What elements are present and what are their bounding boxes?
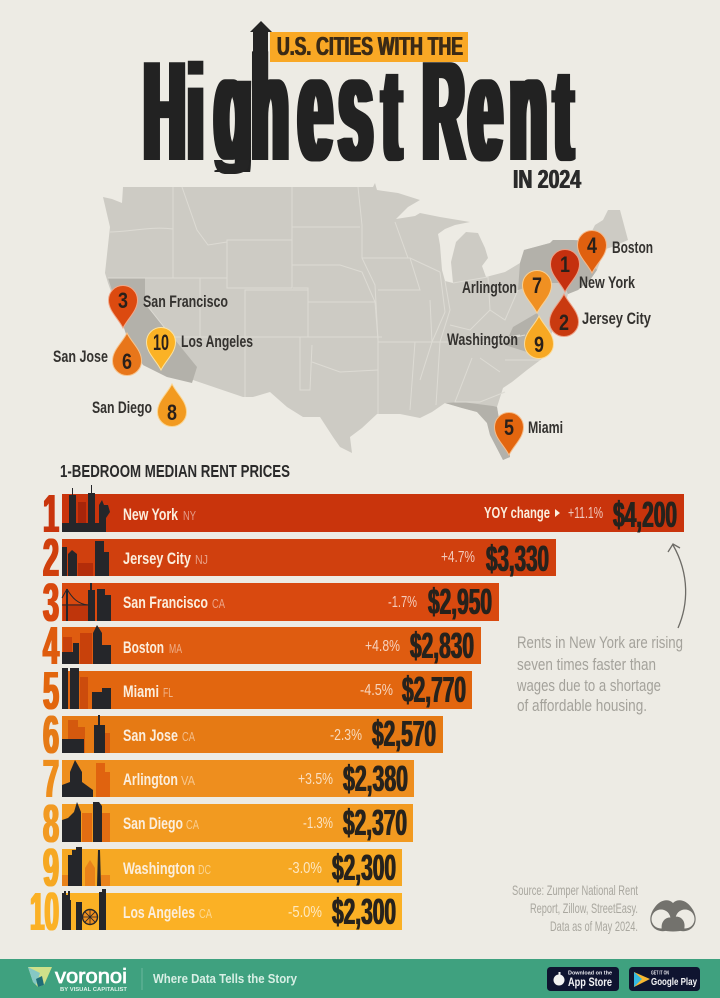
state border lines	[108, 187, 540, 414]
row 3: San Francisco: $2,950	[428, 581, 492, 622]
row 2: Jersey City: NJ	[195, 552, 208, 567]
row 9: Washington: 9	[43, 838, 59, 898]
map landmass	[103, 183, 628, 460]
map city labels: Washington	[447, 331, 518, 349]
pin: 10 Los Angeles	[146, 328, 176, 370]
badge: App Store: App Store	[568, 975, 612, 989]
row 2: Jersey City: +4.7%	[441, 549, 475, 566]
pin: 4 Boston: 4	[587, 233, 598, 258]
pin: 2 Jersey City	[550, 294, 578, 336]
title: Highest Rent: t	[383, 42, 401, 189]
pin: 7 Arlington: 7	[532, 273, 542, 298]
title: Highest Rent	[144, 51, 576, 172]
highlighted states: New York and New England	[518, 240, 597, 294]
pin: 3 San Francisco	[108, 286, 138, 328]
source note: Source: Zumper National Rent	[512, 882, 638, 898]
badge: App Store: Download on the	[568, 970, 612, 976]
bar chart: 1-bedroom median rent	[30, 484, 684, 942]
row 3: San Francisco: -1.7%	[388, 594, 417, 611]
map city labels: New York	[579, 274, 636, 292]
row 6: San Jose: -2.3%	[330, 727, 362, 744]
row 10: Los Angeles	[30, 882, 402, 942]
callout text	[516, 633, 683, 715]
map city labels: Jersey City	[582, 310, 652, 328]
title: Highest Rent: ghes	[215, 26, 372, 193]
row 9: Washington: Washington	[123, 860, 195, 878]
row 2: Jersey City	[43, 528, 556, 588]
chart heading: 1-BEDROOM MEDIAN RENT PRICES	[60, 461, 290, 481]
pin: 5 Miami	[494, 412, 524, 455]
row 1: New York: New York	[123, 506, 179, 524]
title: Highest Rent: R	[423, 31, 464, 190]
logo: Voronoi mark	[28, 967, 52, 987]
pin: 9 Washington	[524, 316, 554, 358]
pin: 6 San Jose: 6	[122, 349, 132, 374]
row 1: New York: 1	[43, 484, 59, 544]
map of the United States with pins	[53, 183, 653, 460]
letter g hook	[214, 160, 249, 174]
row 2: Jersey City: $3,330	[486, 538, 549, 579]
map city labels: Boston	[612, 239, 653, 257]
row 7: Arlington: +3.5%	[298, 771, 333, 788]
row 5: Miami: 5	[43, 661, 59, 721]
row 1: New York	[43, 484, 684, 544]
pin: 7 Arlington	[522, 270, 552, 313]
row 9: Washington: DC	[198, 862, 211, 877]
row 10: Los Angeles: 10	[30, 882, 59, 942]
footer bar	[0, 959, 720, 998]
icon: binoculars	[650, 900, 696, 932]
row 6: San Jose	[43, 705, 443, 765]
row 9: Washington: $2,300	[332, 847, 396, 888]
row 7: Arlington: VA	[181, 773, 195, 788]
badge: Google Play	[629, 967, 700, 991]
title: Highest Rent: i	[188, 38, 203, 190]
tagline: Where Data Tells the Story	[153, 972, 297, 986]
row 10: Los Angeles: Los Angeles	[123, 904, 195, 922]
map city labels: San Diego	[92, 399, 152, 417]
row 8: San Diego: -1.3%	[303, 815, 333, 832]
arrow: callout pointing to New York bar	[668, 544, 686, 628]
row 6: San Jose: San Jose	[123, 727, 178, 745]
pin: 1 New York	[550, 250, 580, 292]
row 6: San Jose: CA	[182, 729, 195, 744]
source note: Report, Zillow, StreetEasy.	[530, 900, 638, 916]
row 5: Miami: Miami	[123, 683, 159, 701]
callout text: seven times faster than	[517, 655, 656, 674]
row 3: San Francisco: San Francisco	[123, 594, 208, 612]
badge: Google Play: Google Play	[651, 976, 697, 988]
pin: 5 Miami: 5	[504, 415, 514, 440]
subtitle: in 2024: IN 2024	[513, 164, 581, 194]
row 6: San Jose: $2,570	[372, 713, 436, 754]
title: Highest Rent: t	[555, 42, 572, 189]
pin: 9 Washington: 9	[534, 332, 544, 357]
row 2: Jersey City: 2	[43, 528, 59, 588]
icon: up arrow rising from the h	[250, 21, 272, 80]
pin: 8 San Diego: 8	[167, 400, 177, 425]
map city labels: Arlington	[462, 279, 517, 297]
row 3: San Francisco	[43, 573, 499, 633]
row 10: Los Angeles: CA	[199, 906, 212, 921]
row 3: San Francisco: 3	[43, 573, 59, 633]
pin: 2 Jersey City: 2	[559, 310, 569, 335]
row 5: Miami: -4.5%	[360, 682, 393, 699]
row 6: San Jose: 6	[43, 705, 59, 765]
row 9: Washington	[43, 838, 402, 898]
row 2: Jersey City: Jersey City	[123, 550, 192, 568]
row 1: New York: +11.1%	[568, 505, 603, 522]
row 4: Boston: $2,830	[410, 625, 474, 666]
row 8: San Diego: San Diego	[123, 815, 183, 833]
row 9: Washington: -3.0%	[288, 860, 322, 877]
source note	[512, 882, 638, 934]
source note: Data as of May 2024.	[550, 918, 638, 934]
row 8: San Diego: $2,370	[343, 802, 407, 843]
row 8: San Diego: CA	[186, 817, 199, 832]
wordmark: voronoi: BY VISUAL CAPITALIST	[60, 987, 127, 993]
row 4: Boston: Boston	[123, 639, 164, 657]
title: Highest Rent: en	[469, 26, 547, 193]
row 5: Miami: FL	[163, 685, 173, 700]
badge: App Store	[547, 967, 619, 991]
subtitle highlight: U.S. cities with the: U.S. CITIES WITH THE	[277, 31, 463, 61]
pin: 4 Boston	[578, 230, 606, 273]
row 1: New York: NY	[183, 508, 196, 523]
pin: 8 San Diego	[158, 384, 186, 426]
callout text: of affordable housing.	[517, 696, 647, 715]
map city labels: Miami	[528, 419, 563, 437]
map city labels: San Francisco	[143, 293, 228, 311]
row 8: San Diego	[43, 794, 413, 854]
highlighted states: California	[108, 278, 197, 383]
title: Highest Rent: H	[144, 31, 185, 190]
badge: Google Play: GET IT ON	[651, 970, 669, 976]
row 5: Miami: $2,770	[402, 669, 466, 710]
row 4: Boston: +4.8%	[365, 638, 400, 655]
pin: 3 San Francisco: 3	[118, 288, 128, 313]
row 3: San Francisco: CA	[212, 596, 225, 611]
row 7: Arlington: 7	[43, 749, 59, 809]
pin: 10 Los Angeles: 10	[153, 330, 169, 355]
row 8: San Diego: 8	[43, 794, 59, 854]
row 7: Arlington: Arlington	[123, 771, 178, 789]
pin: 1 New York: 1	[560, 252, 570, 277]
row 4: Boston: 4	[43, 616, 59, 676]
row 7: Arlington	[43, 749, 414, 809]
map city labels: Los Angeles	[181, 333, 253, 351]
row 7: Arlington: $2,380	[343, 758, 408, 799]
row 1: New York: YOY change	[484, 505, 550, 522]
row 10: Los Angeles: $2,300	[332, 891, 396, 932]
row 5: Miami	[43, 661, 472, 721]
row 4: Boston	[43, 616, 481, 676]
title block	[144, 21, 581, 194]
pin: 6 San Jose	[112, 333, 142, 376]
map city labels: San Jose	[53, 348, 108, 366]
row 4: Boston: MA	[169, 641, 182, 656]
wordmark: voronoi: voronoi	[55, 966, 127, 988]
callout text: wages due to a shortage	[516, 676, 661, 695]
highlighted states: Virginia and D.C.	[505, 313, 550, 352]
subtitle highlight: U.S. cities with the	[270, 31, 468, 62]
highlighted states: Florida	[445, 402, 510, 460]
row 10: Los Angeles: -5.0%	[288, 904, 322, 921]
row 1: New York: $4,200	[613, 494, 677, 535]
map city labels	[53, 239, 653, 437]
